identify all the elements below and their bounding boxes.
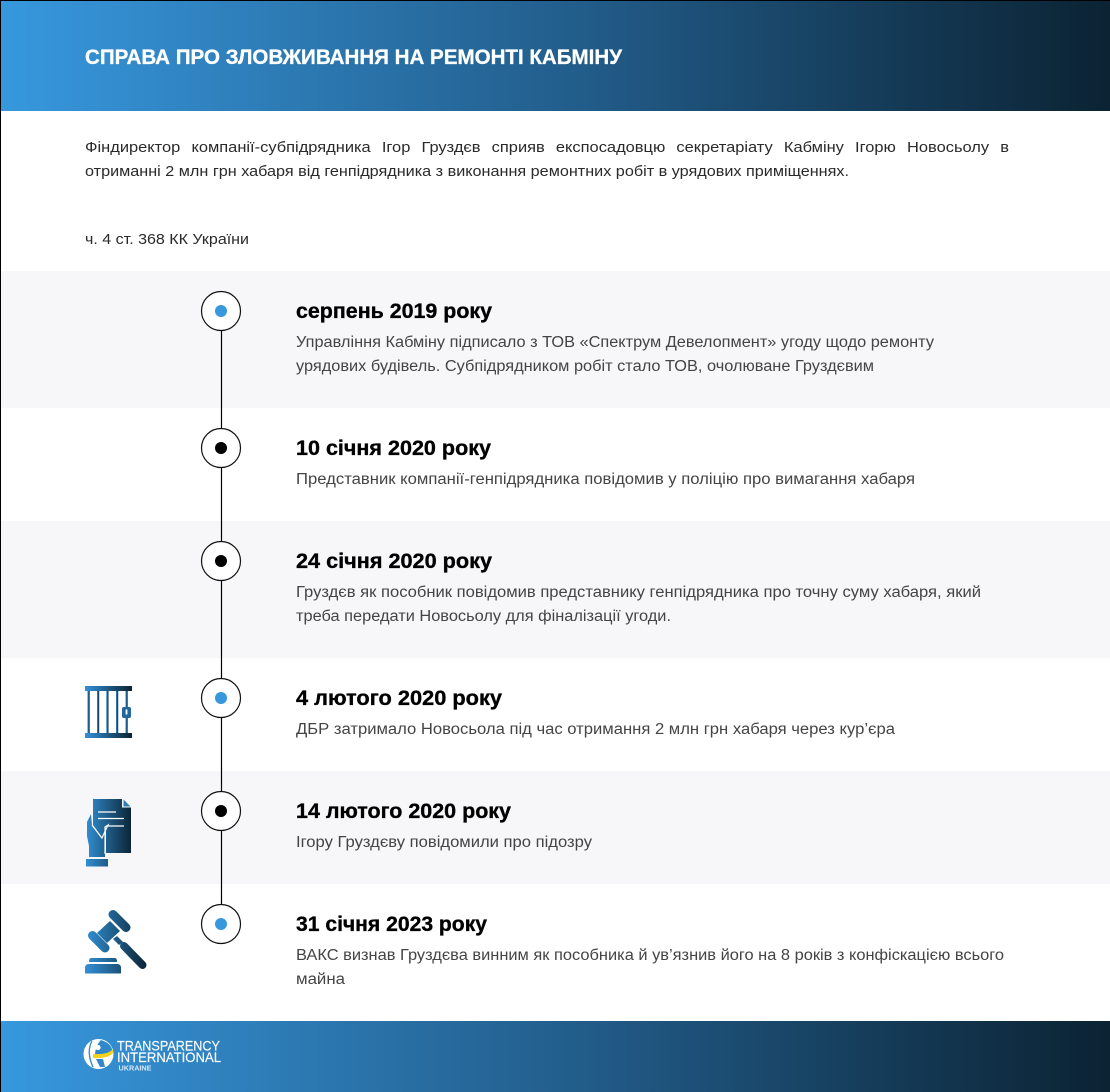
timeline line	[220, 311, 222, 924]
intro paragraph	[85, 139, 1009, 180]
event: 31 січня 2023 року: майна	[296, 971, 345, 988]
logo: Transparency International Ukraine: INTERNATIONAL	[117, 1050, 221, 1065]
timeline marker: 10 січня 2020	[202, 428, 240, 468]
event: серпень 2019 року: урядових будівель. Субпідрядником робіт стало ТОВ, очолюване Груздєвим	[296, 358, 874, 375]
event: 14 лютого 2020 року: 14 лютого 2020 року	[296, 800, 511, 823]
intro paragraph: Фіндиректор компанії-субпідрядника Ігор Груздєв сприяв експосадовцю секретаріату Кабміну Ігорю Новосьолу в	[85, 139, 1009, 156]
event: 10 січня 2020 року: 10 січня 2020 року	[296, 437, 491, 460]
event: 14 лютого 2020 року	[296, 800, 592, 851]
event: 31 січня 2023 року: ВАКС визнав Груздєва винним як пособника й ув’язнив його на 8 років з конфіскацією всього	[296, 947, 1004, 964]
event: серпень 2019 року	[296, 300, 934, 375]
logo: Transparency International Ukraine: UKRAINE	[118, 1064, 152, 1072]
logo: Transparency International Ukraine: TRANSPARENCY	[117, 1038, 220, 1054]
footer banner	[0, 1021, 1110, 1092]
timeline marker: серпень 2019	[202, 292, 240, 330]
icon: prison bars	[85, 686, 132, 738]
event: 4 лютого 2020 року: 4 лютого 2020 року	[296, 687, 502, 710]
event: 24 січня 2020 року: Груздєв як пособник повідомив представнику генпідрядника про точну суму хабаря, який	[296, 584, 981, 601]
event: 10 січня 2020 року	[296, 437, 915, 488]
intro paragraph: отриманні 2 млн грн хабаря від генпідрядника з виконання ремонтних робіт в урядових приміщеннях.	[85, 163, 849, 180]
timeline marker: 4 лютого 2020	[202, 678, 240, 718]
timeline marker: 14 лютого 2020	[202, 792, 240, 830]
icon: judge gavel	[85, 914, 142, 974]
timeline marker: 24 січня 2020	[202, 542, 240, 580]
event: 24 січня 2020 року: треба передати Новосьолу для фіналізації угоди.	[296, 608, 671, 625]
event: серпень 2019 року: серпень 2019 року	[296, 300, 492, 323]
event: 24 січня 2020 року: 24 січня 2020 року	[296, 550, 492, 573]
event: 24 січня 2020 року	[296, 550, 981, 625]
legal article reference: ч. 4 ст. 368 КК України	[85, 231, 249, 248]
logo: Transparency International Ukraine	[84, 1038, 221, 1072]
icon: document in hand	[86, 799, 131, 866]
header banner	[0, 0, 1110, 111]
event: 10 січня 2020 року: Представник компанії-генпідрядника повідомив у поліцію про вимагання хабаря	[296, 471, 915, 488]
row backgrounds	[0, 271, 1110, 884]
event: 31 січня 2023 року	[296, 913, 1004, 988]
event: 4 лютого 2020 року: ДБР затримало Новосьола під час отримання 2 млн грн хабаря через кур’єра	[296, 721, 895, 738]
timeline marker: 31 січня 2023	[202, 904, 240, 944]
event: 4 лютого 2020 року	[296, 687, 895, 738]
event: 31 січня 2023 року: 31 січня 2023 року	[296, 913, 487, 936]
event: серпень 2019 року: Управління Кабміну підписало з ТОВ «Спектрум Девелопмент» угоду щодо ремонту	[296, 334, 934, 351]
title: СПРАВА ПРО ЗЛОВЖИВАННЯ НА РЕМОНТІ КАБМІНУ	[85, 46, 623, 69]
event: 14 лютого 2020 року: Ігору Груздєву повідомили про підозру	[296, 834, 592, 851]
